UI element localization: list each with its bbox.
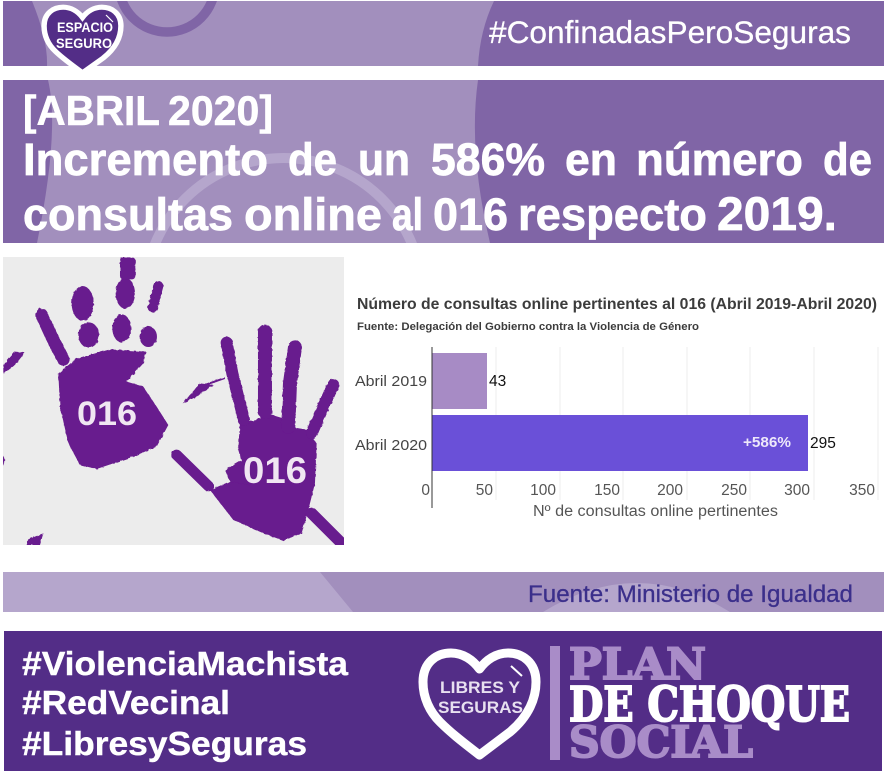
axis tick labels: 150 xyxy=(594,482,620,499)
axis title: Nº de consultas online pertinentes xyxy=(533,503,778,520)
chart source: Fuente: Delegación del Gobierno contra la Violencia de Género xyxy=(357,321,699,333)
category labels: Abril 2019 xyxy=(355,373,427,390)
panel: top header band xyxy=(3,0,884,66)
title: headline: online xyxy=(244,189,382,240)
icon: Libres y Seguras heart: LIBRES Y xyxy=(440,678,521,697)
axis tick labels: 50 xyxy=(476,482,493,499)
annotation: +586%: +586% xyxy=(743,435,791,451)
axis tick labels: 200 xyxy=(657,482,683,499)
hashtags: #ViolenciaMachista xyxy=(22,645,349,682)
category labels: Abril 2020 xyxy=(355,437,427,454)
panel: source band xyxy=(3,572,884,612)
chart title: Número de consultas online pertinentes al 016 (Abril 2019-Abril 2020) xyxy=(357,296,877,313)
axis tick labels: 300 xyxy=(784,482,810,499)
hashtags xyxy=(22,645,349,762)
icon: Libres y Seguras heart: SEGURAS xyxy=(438,698,523,717)
source text: Fuente: Ministerio de Igualdad xyxy=(528,581,853,608)
axis tick labels: 0 xyxy=(421,482,430,499)
title: headline: un xyxy=(358,134,410,185)
logo: Plan de Choque Social xyxy=(569,640,850,768)
icon: Espacio Seguro heart: SEGURO xyxy=(56,36,112,51)
panel: footer band xyxy=(4,631,882,771)
hashtags: #LibresySeguras xyxy=(22,725,307,762)
title: date: 2020] xyxy=(168,87,273,134)
logo: Plan de Choque Social: PLAN xyxy=(569,640,706,690)
divider bar xyxy=(550,646,560,760)
title: headline: de xyxy=(823,134,872,185)
title: headline: consultas xyxy=(23,189,233,240)
title: headline: de xyxy=(288,134,337,185)
title: headline: respecto xyxy=(518,189,707,240)
value labels xyxy=(489,373,836,452)
title: headline: al xyxy=(392,189,423,240)
title: headline: en xyxy=(565,134,617,185)
value labels: 295 xyxy=(810,435,836,452)
right hand print xyxy=(3,332,347,548)
title: headline: 016 xyxy=(433,189,508,240)
bar: Abril 2019 xyxy=(432,353,487,409)
hashtags: #RedVecinal xyxy=(22,684,230,721)
title: headline xyxy=(23,134,872,240)
bar chart: consultas online xyxy=(355,296,878,520)
title: date xyxy=(23,87,273,134)
axis tick labels xyxy=(421,482,875,499)
axis tick labels: 250 xyxy=(721,482,747,499)
title: headline: 586% xyxy=(431,134,545,185)
axis tick labels: 100 xyxy=(530,482,556,499)
title: headline: 2019. xyxy=(717,187,837,240)
bar: Abril 2020 xyxy=(432,415,808,471)
icon: Libres y Seguras heart xyxy=(423,653,536,755)
icon: Espacio Seguro heart: ESPACIO xyxy=(57,20,113,35)
title: date: [ABRIL xyxy=(23,87,160,134)
axis tick labels: 350 xyxy=(849,482,875,499)
left hand print xyxy=(42,257,168,469)
logo: Plan de Choque Social: SOCIAL xyxy=(569,718,753,768)
title: headline: número xyxy=(636,134,803,185)
panel: title band xyxy=(3,80,884,243)
category labels xyxy=(355,373,427,454)
title: headline: Incremento xyxy=(23,134,268,185)
value labels: 43 xyxy=(489,373,506,390)
hashtag: ConfinadasPeroSeguras: #ConfinadasPeroSeguras xyxy=(489,14,851,50)
label: 016 right: 016 xyxy=(243,450,307,491)
icon: Espacio Seguro heart xyxy=(44,7,121,73)
photo: purple handprints xyxy=(3,257,347,548)
label: 016 left: 016 xyxy=(77,395,137,433)
